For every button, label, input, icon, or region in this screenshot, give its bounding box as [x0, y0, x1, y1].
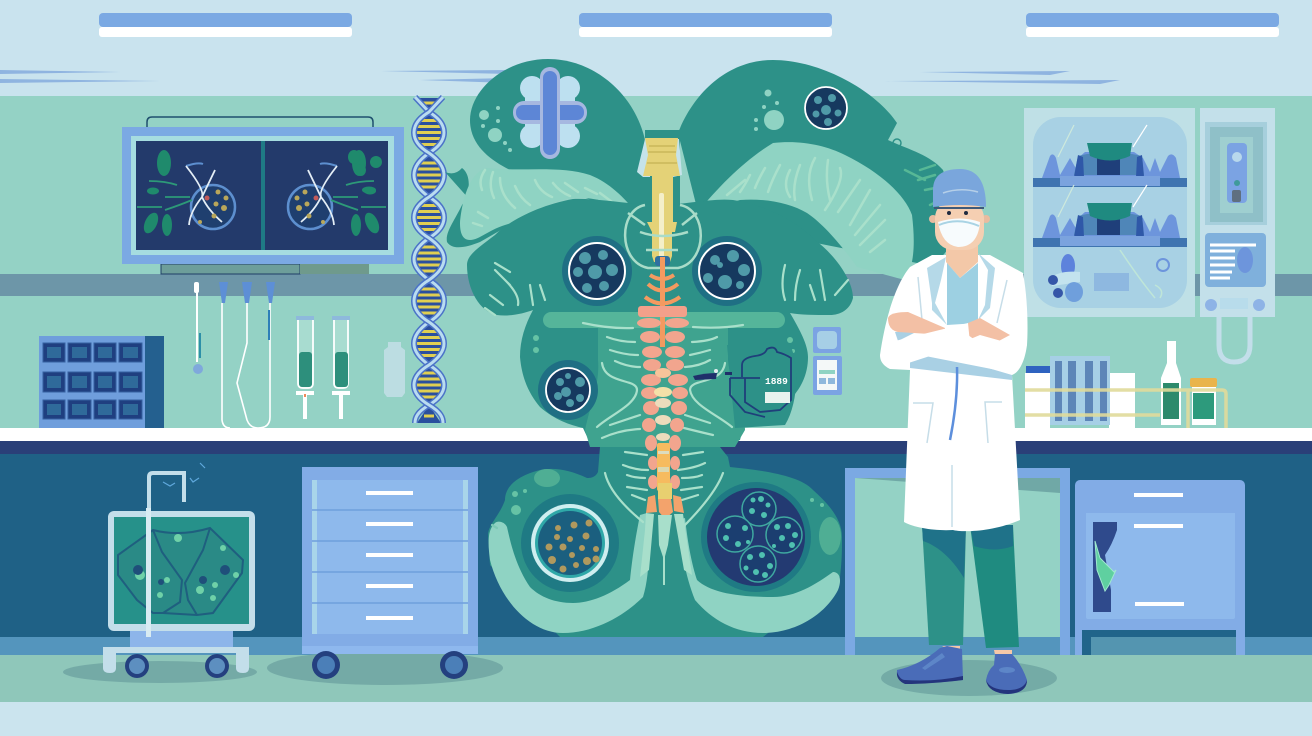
bench glassware [1025, 341, 1226, 428]
wall control panel [39, 336, 164, 428]
top left lobe circles [479, 90, 784, 152]
upper lobes [445, 59, 949, 280]
pump device: 1889 [765, 376, 788, 387]
body ribs [485, 263, 848, 528]
lab coat [880, 255, 1028, 531]
mask [938, 218, 980, 247]
chest shading [585, 320, 745, 447]
door frame [845, 468, 1070, 655]
test tubes [296, 316, 405, 419]
neck [946, 240, 978, 278]
spine [625, 138, 701, 585]
wall plates [813, 327, 842, 395]
right lower band [678, 518, 840, 633]
floor shadow [881, 660, 1057, 696]
cap [933, 169, 986, 207]
tracheal ring [625, 205, 701, 268]
hand [968, 318, 1010, 343]
ankles [942, 646, 1012, 655]
forearm [888, 312, 945, 335]
trolley with lungs display [63, 463, 257, 683]
hanging instruments [193, 282, 275, 428]
pump device [693, 345, 796, 428]
legs [922, 525, 966, 645]
wall cabinet [1024, 108, 1275, 362]
scrubs [947, 263, 978, 325]
sleeves [880, 323, 1027, 375]
wall monitor [122, 117, 404, 274]
tail on left lobe [445, 168, 515, 247]
four cells [717, 492, 802, 582]
left lower band [489, 513, 649, 633]
sacrum [646, 495, 684, 519]
body spots [511, 335, 841, 555]
cell circles [521, 87, 847, 592]
arm shadow [895, 330, 1012, 380]
shoulder band [543, 312, 785, 328]
lapels [927, 253, 995, 325]
right cabinet [1075, 480, 1245, 655]
dna helix [414, 97, 444, 423]
zipper [950, 367, 957, 440]
central body [467, 199, 853, 637]
flower icon [513, 67, 587, 159]
doctor [880, 169, 1057, 696]
ceiling lights [99, 13, 1279, 37]
head [929, 215, 937, 223]
shoes [897, 646, 963, 683]
drawer cart [267, 467, 503, 685]
